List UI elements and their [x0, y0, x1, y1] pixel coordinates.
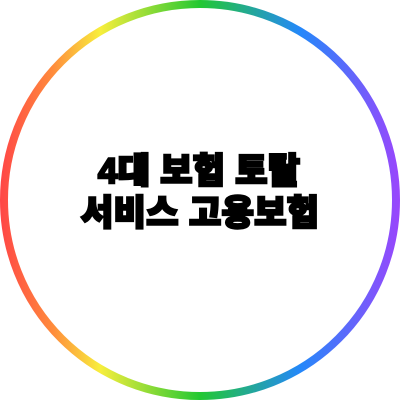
title: 4대 보험 토탈 [98, 152, 300, 191]
title: 서비스 고용보험 [81, 194, 319, 233]
title [81, 152, 319, 233]
